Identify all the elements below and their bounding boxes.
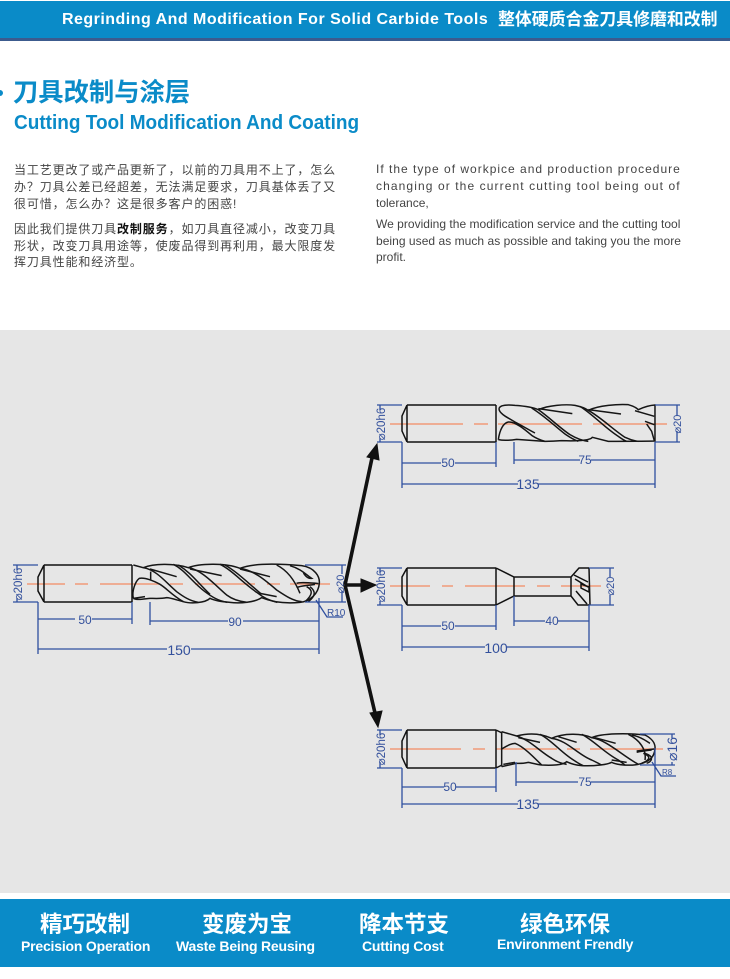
modified tool: 135 square end mill: 50 [441,456,455,470]
original tool drawing: 90 [228,615,242,629]
english text block [376,162,681,264]
footer banner [0,899,730,967]
feature: environment frendly: Environment Frendly [497,936,633,952]
feature: environment frendly [497,912,634,952]
english text block: profit. [376,250,406,264]
chinese text block [14,163,336,269]
english text block: If the type of workpice and production procedure [376,162,681,176]
section title chinese: 刀具改制与涂层 [13,79,190,107]
feature: cutting cost [359,912,449,954]
feature: cutting cost: 降本节支 [359,912,449,937]
header banner [0,1,730,41]
modified tool: 100 t-slot cutter: 50 [441,619,455,633]
header title chinese: 整体硬质合金刀具修磨和改制 [498,10,718,29]
modified tool: 135 ball end mill: 135 [516,796,540,812]
modified tool: 135 square end mill: 75 [578,453,592,467]
english text block: We providing the modification service and the cutting tool [376,217,680,231]
modified tool: 135 ball end mill: ⌀20h6 [376,733,388,765]
modified tool: 100 t-slot cutter: 100 [484,640,508,656]
original tool drawing: 50 [78,613,92,627]
english text block: changing or the current cutting tool being out of [376,179,681,193]
arrows from original tool to modified tools [345,444,382,727]
feature: waste being reusing [176,912,315,954]
section bullet [0,90,3,96]
chinese text block: 当工艺更改了或产品更新了，以前的刀具用不上了，怎么 [14,163,336,177]
modified tool: 135 square end mill: 135 [516,476,540,492]
chinese text block: 挥刀具性能和经济型。 [14,255,143,269]
feature: waste being reusing: 变废为宝 [202,912,292,937]
original tool drawing: R10 [327,608,346,619]
section title english: Cutting Tool Modification And Coating [14,112,359,134]
feature: cutting cost: Cutting Cost [362,938,444,954]
modified tool: 100 t-slot cutter [376,568,617,656]
diagram panel [0,330,730,893]
chinese text block: 因此我们提供刀具改制服务，如刀具直径减小，改变刀具 [14,222,336,236]
feature: waste being reusing: Waste Being Reusing [176,938,315,954]
feature: precision operation: Precision Operation [21,938,150,954]
chinese text block: 办？刀具公差已经超差，无法满足要求，刀具基体丢了又 [14,180,336,194]
header title english: Regrinding And Modification For Solid Carbide Tools [62,11,488,28]
original tool drawing: ⌀20 [335,575,347,593]
modified tool: 135 ball end mill: 50 [443,780,457,794]
modified tool: 100 t-slot cutter: 40 [545,614,559,628]
modified tool: 135 square end mill: ⌀20h6 [376,408,388,440]
feature: precision operation [21,912,150,954]
modified tool: 135 square end mill [376,405,684,492]
original tool drawing: ⌀20h6 [13,568,25,600]
modified tool: 135 ball end mill [376,730,680,812]
english text block: tolerance, [376,196,429,210]
modified tool: 135 ball end mill: 75 [578,775,592,789]
feature: precision operation: 精巧改制 [40,912,130,937]
english text block: being used as much as possible and taking you the more [376,234,681,248]
modified tool: 135 ball end mill: ⌀16 [664,737,680,761]
chinese text block: 很可惜，怎么办？这是很多客户的困惑! [14,197,237,211]
modified tool: 100 t-slot cutter: ⌀20 [605,577,617,595]
original tool drawing [13,564,347,658]
modified tool: 135 ball end mill: R8 [662,768,673,777]
feature: environment frendly: 绿色环保 [520,912,610,937]
modified tool: 135 square end mill: ⌀20 [672,415,684,433]
chinese text block: 形状，改变刀具用途等，使废品得到再利用，最大限度发 [14,239,336,253]
modified tool: 100 t-slot cutter: ⌀20h6 [376,570,388,602]
original tool drawing: 150 [167,642,191,658]
